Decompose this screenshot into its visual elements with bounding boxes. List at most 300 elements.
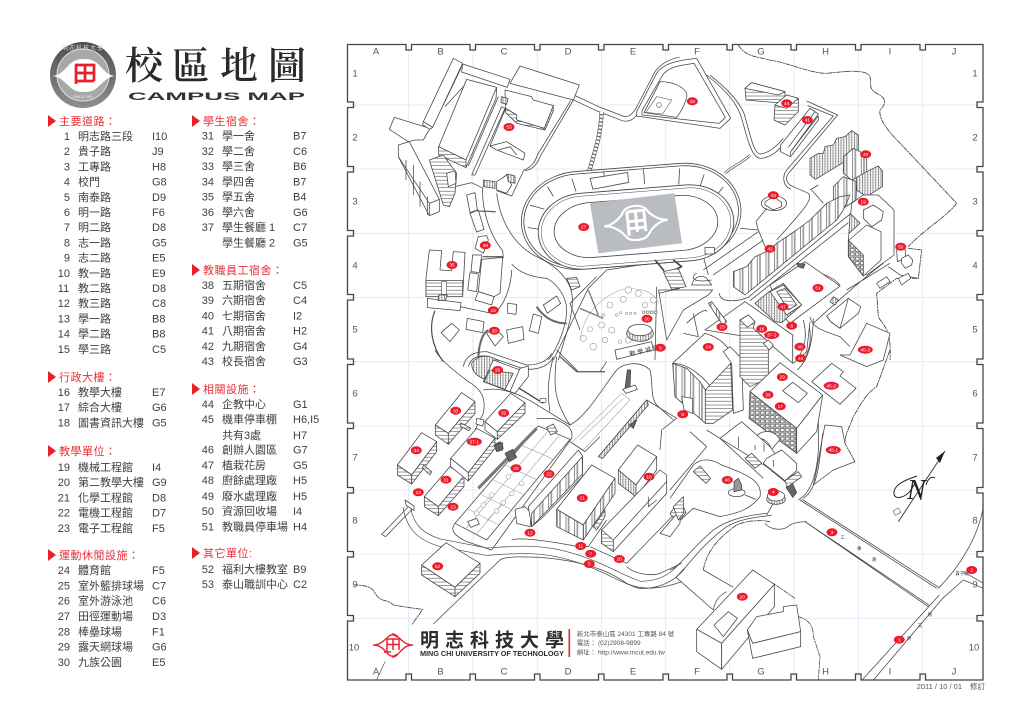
map markers: numbered red labels: 7 — [589, 551, 592, 557]
grid labels: rows right: 9 — [972, 580, 978, 590]
legend: staff dorms: G4 — [293, 341, 308, 353]
grid labels: columns bottom: J — [952, 666, 957, 678]
legend: administration: 圖書資訊大樓 — [78, 416, 144, 430]
legend: sports and leisure: D3 — [152, 611, 166, 623]
subtitle: campus map: CAMPUS MAP — [128, 91, 305, 103]
legend: staff dorms: 40 — [202, 310, 214, 322]
legend: related facilities: 植栽花房 — [222, 458, 266, 472]
legend: sports and leisure: 26 — [58, 596, 70, 608]
legend: student dorms: B7 — [293, 176, 306, 188]
legend: student dorms: 35 — [202, 192, 214, 204]
building 24: gymnasium — [673, 333, 743, 423]
legend: main roads: 教二路 — [78, 282, 111, 295]
legend: staff dorms: G3 — [293, 356, 308, 368]
map markers: numbered red labels: 16 — [646, 474, 652, 480]
grid labels: columns bottom: D — [565, 666, 572, 678]
legend: sports and leisure: 棒壘球場 — [78, 624, 122, 638]
legend: sports and leisure: 田徑運動場 — [78, 609, 133, 623]
legend: related facilities — [192, 382, 319, 534]
legend: sports and leisure: C7 — [152, 580, 166, 592]
legend: main roads: B8 — [152, 313, 165, 325]
grid labels: rows left: 10 — [349, 642, 359, 654]
legend: main roads: 明志路三段 — [78, 129, 133, 143]
legend: student dorms: B7 — [293, 130, 306, 142]
legend: main roads: 12 — [58, 298, 70, 310]
legend: teaching units: 20 — [58, 477, 70, 489]
map markers: numbered red labels: 33 — [453, 408, 459, 414]
legend: other units: 52 — [202, 564, 214, 576]
map markers: numbered red labels: 46 — [725, 478, 730, 484]
building 16 and 21: teaching block and chemistry — [515, 400, 683, 552]
legend: sports and leisure: 25 — [58, 580, 70, 592]
legend: teaching units: 21 — [58, 492, 70, 504]
grid labels: rows right — [969, 68, 979, 654]
title: 校 — [125, 35, 165, 90]
legend: student dorms: 學生餐廳 1 — [222, 220, 275, 234]
legend: main roads — [48, 114, 167, 356]
map markers: numbered red labels: 2 — [970, 568, 973, 574]
legend: main roads: 教一路 — [78, 267, 111, 280]
map markers: numbered red labels: 53 — [506, 125, 512, 131]
legend: related facilities: G7 — [293, 444, 308, 456]
map markers: numbered red labels: 35 — [449, 263, 455, 269]
grid labels: rows right: 3 — [972, 196, 978, 208]
legend: administration: 17 — [58, 402, 70, 414]
grid labels: columns top: E — [630, 46, 636, 58]
legend: student dorms: 32 — [202, 146, 214, 158]
legend: staff dorms: 九期宿舍 — [222, 339, 266, 353]
legend: main roads: G8 — [152, 177, 167, 189]
gate and founder park — [670, 466, 785, 523]
map markers: numbered red labels: 28 — [690, 99, 695, 105]
legend: staff dorms: 39 — [202, 295, 214, 307]
legend: sports and leisure: 露天網球場 — [78, 640, 133, 654]
grid labels: columns bottom — [373, 666, 957, 678]
logo: university seal: 明志科技大學 — [62, 44, 104, 52]
map markers: numbered red labels: 8 — [790, 323, 793, 329]
map markers: numbered red labels: 20 — [740, 594, 745, 600]
legend: student dorms: 36 — [202, 207, 214, 219]
legend: main roads: J9 — [152, 146, 164, 158]
legend: staff dorms: C5 — [293, 280, 307, 292]
legend: related facilities: 46 — [202, 444, 214, 456]
legend: teaching units: D7 — [152, 508, 166, 520]
legend: administration: G5 — [152, 418, 167, 430]
title: 區 — [172, 35, 210, 90]
legend: sports and leisure: E5 — [152, 657, 165, 669]
legend: administration: 行政大樓： — [59, 370, 116, 384]
legend: main roads: 教三路 — [78, 297, 111, 310]
legend: main roads: D8 — [152, 283, 166, 295]
legend: teaching units: 19 — [58, 462, 70, 474]
grid labels: rows left: 7 — [352, 452, 358, 464]
legend: teaching units: 機械工程館 — [78, 460, 133, 474]
legend: other units: 泰山職訓中心 — [222, 577, 288, 591]
legend: administration: G6 — [152, 402, 167, 414]
legend: related facilities: 44 — [202, 399, 214, 411]
grid labels: rows right: 7 — [972, 452, 978, 464]
footer: red divider — [568, 629, 570, 657]
legend: staff dorms — [192, 263, 308, 368]
legend: teaching units: 電子工程館 — [78, 521, 133, 535]
grid labels: rows left: 9 — [352, 580, 358, 590]
legend: administration: 綜合大樓 — [78, 400, 122, 414]
legend: related facilities: 共有3處 — [222, 428, 261, 442]
legend: related facilities: 51 — [202, 522, 214, 534]
road name labels: 路 — [872, 556, 877, 563]
grid labels: columns bottom: E — [630, 666, 636, 678]
baseball field — [637, 58, 731, 128]
legend: sports and leisure: 九族公園 — [78, 655, 122, 669]
footer: address block — [577, 629, 675, 656]
legend: main roads: 9 — [64, 253, 70, 265]
legend: student dorms: 31 — [202, 130, 214, 142]
map markers: numbered red labels: 38 — [492, 328, 497, 334]
legend: other units: 53 — [202, 579, 214, 591]
map markers: numbered red labels: 25 — [513, 466, 519, 472]
grid labels: rows left: 2 — [352, 132, 358, 144]
map markers: numbered red labels: 4 — [772, 490, 775, 496]
grid labels: rows right: 10 — [969, 642, 979, 654]
grid labels: rows left: 4 — [352, 260, 358, 272]
footer: university emblem — [373, 634, 413, 657]
grid labels: rows left: 8 — [352, 516, 358, 526]
grid labels: columns bottom: F — [694, 666, 700, 678]
legend: teaching units: 22 — [58, 508, 70, 520]
map markers: numbered red labels: 9 — [659, 345, 662, 351]
map markers: numbered red labels: 37-2 — [767, 333, 777, 339]
road name labels: 路 — [928, 611, 933, 618]
map markers: numbered red labels: 14 — [416, 490, 421, 496]
road name labels — [840, 535, 969, 642]
grid labels: columns bottom: B — [437, 666, 444, 678]
map markers: numbered red labels: 32 — [501, 411, 507, 417]
legend: sports and leisure: G6 — [152, 642, 167, 654]
grid labels: columns bottom: H — [822, 666, 829, 678]
grid labels: columns top: H — [822, 46, 829, 58]
grid labels: rows right: 8 — [972, 516, 978, 526]
legend: staff dorms: 41 — [202, 326, 214, 338]
map markers: numbered red labels: 43 — [771, 193, 776, 199]
building 20: second teaching building — [697, 570, 801, 669]
legend: main roads: 7 — [64, 222, 70, 234]
grid labels: columns bottom: I — [889, 666, 891, 678]
legend: main roads: E9 — [152, 268, 165, 280]
road name labels: 明 — [907, 636, 912, 642]
legend: main roads: 明二路 — [78, 221, 111, 234]
grid labels: columns top: I — [889, 46, 891, 58]
legend: staff dorms: 七期宿舍 — [222, 308, 266, 322]
legend: teaching units: 23 — [58, 523, 70, 535]
buildings: east zone dorms 40-44, 19, 47, 50 — [705, 83, 913, 367]
legend: main roads: B8 — [152, 329, 165, 341]
legend: sports and leisure: F1 — [152, 626, 165, 638]
map markers: numbered red labels: 27 — [581, 225, 587, 231]
compass: north arrow — [893, 451, 945, 522]
map markers: numbered red labels: 48 — [797, 344, 803, 350]
legend: main roads: D8 — [152, 222, 166, 234]
map markers: numbered red labels: 11 — [578, 544, 584, 550]
legend: administration — [48, 370, 167, 430]
legend: main roads: 5 — [64, 192, 70, 204]
grid labels: columns top: C — [501, 46, 508, 58]
map markers: numbered red labels: 52 — [435, 564, 441, 570]
map: roads west — [432, 59, 680, 362]
map markers: numbered red labels: 34 — [414, 448, 419, 454]
map: roads south-west — [353, 350, 682, 680]
revision date: 修訂 — [970, 681, 985, 691]
legend: sports and leisure: 室外籃排球場 — [78, 578, 144, 592]
legend: main roads: 貴子路 — [78, 144, 111, 158]
legend: related facilities: G1 — [293, 399, 308, 411]
building 17, 29, 36: main complex — [720, 363, 856, 497]
legend: staff dorms: 43 — [202, 356, 214, 368]
legend: sports and leisure: F5 — [152, 565, 165, 577]
legend: main roads: 學二路 — [78, 328, 111, 341]
map markers: numbered red labels: 44 — [784, 101, 790, 107]
legend: teaching units: 電機工程館 — [78, 506, 133, 520]
road name labels: 志 — [918, 622, 923, 628]
grid labels: rows left: 3 — [352, 196, 358, 208]
map markers: numbered red labels: 49 — [798, 356, 804, 362]
legend: student dorms: 學二舍 — [222, 144, 255, 158]
legend: main roads: E5 — [152, 253, 165, 265]
legend: main roads: 4 — [64, 177, 70, 189]
legend: student dorms: B6 — [293, 161, 306, 173]
legend: administration: E7 — [152, 387, 165, 399]
compass: north arrow: N — [906, 475, 927, 506]
legend: related facilities: H7 — [293, 430, 307, 442]
legend: other units — [192, 546, 307, 591]
legend: teaching units: F5 — [152, 523, 165, 535]
legend: main roads: 主要道路： — [59, 114, 116, 128]
map markers: numbered red labels: 13 — [450, 504, 456, 510]
map markers: numbered red labels: 41 — [805, 118, 810, 124]
map markers: numbered red labels: 36 — [765, 392, 771, 398]
legend: sports and leisure: 24 — [58, 565, 70, 577]
legend: main roads: G5 — [152, 237, 167, 249]
building 23 and 18: electronics and library — [683, 302, 813, 387]
legend: main roads: I10 — [152, 131, 167, 143]
legend: related facilities: 50 — [202, 506, 214, 518]
grid labels: columns bottom: G — [757, 666, 765, 678]
stadium centre emblem — [590, 193, 682, 253]
map markers: numbered red labels: 17 — [778, 404, 783, 410]
legend: related facilities: 49 — [202, 491, 214, 503]
legend: main roads: H8 — [152, 161, 166, 173]
legend: student dorms: 學生餐廳 2 — [222, 235, 275, 249]
legend: teaching units: 教學單位： — [59, 444, 116, 458]
legend: main roads: 志二路 — [78, 252, 111, 265]
legend: main roads: 學一路 — [78, 312, 111, 325]
map markers: numbered red labels: 45-1 — [828, 448, 838, 454]
legend: main roads: C8 — [152, 298, 166, 310]
title: 地 — [220, 35, 258, 90]
legend: main roads: 3 — [64, 161, 70, 173]
map markers: numbered red labels: 1 — [898, 637, 901, 643]
building 53: vocational training centre — [483, 66, 579, 193]
grid labels: columns top: G — [757, 46, 765, 58]
grid labels: columns top: D — [565, 46, 572, 58]
map markers: numbered red labels: 29 — [780, 375, 785, 381]
map markers: numbered red labels: 10 — [617, 557, 622, 563]
road name labels: 工 — [840, 535, 845, 540]
legend: sports and leisure — [48, 548, 167, 669]
map markers: numbered red labels: 12 — [527, 530, 533, 536]
legend: main roads: 工專路 — [78, 160, 111, 173]
legend: administration: 16 — [58, 387, 70, 399]
legend: related facilities: 教職員停車場 — [222, 520, 288, 534]
map markers: numbered red labels — [411, 97, 977, 644]
legend: related facilities: H6,I5 — [293, 414, 319, 426]
footer: university name: 明志科技大學 — [420, 630, 564, 652]
grid labels: rows left: 6 — [352, 388, 358, 400]
legend: related facilities: 47 — [202, 460, 214, 472]
grid labels: columns top — [373, 46, 957, 58]
road name labels: 專 — [857, 545, 862, 551]
legend: staff dorms: 38 — [202, 280, 214, 292]
map markers: numbered red labels: 45-3 — [860, 347, 870, 353]
legend: main roads: 8 — [64, 237, 70, 249]
legend: student dorms: B4 — [293, 192, 306, 204]
legend: staff dorms: 42 — [202, 341, 214, 353]
logo: university seal: SINCE 1963 — [73, 95, 93, 99]
grid labels: rows right: 5 — [972, 324, 978, 336]
legend: student dorms: 學生宿舍： — [203, 114, 260, 128]
map: roads east — [693, 45, 957, 360]
legend: main roads: F6 — [152, 207, 165, 219]
map markers: numbered red labels: 51 — [815, 286, 821, 292]
title: 圖 — [268, 35, 306, 90]
legend: sports and leisure: 27 — [58, 611, 70, 623]
map markers: numbered red labels: 15 — [491, 308, 496, 314]
legend: related facilities: 48 — [202, 475, 214, 487]
legend: staff dorms: 五期宿舍 — [222, 278, 266, 292]
map markers: numbered red labels: 5 — [588, 562, 591, 568]
legend: student dorms: 33 — [202, 161, 214, 173]
logo: university seal — [50, 42, 116, 108]
park: nine clans park — [560, 260, 713, 372]
legend: related facilities: 45 — [202, 414, 214, 426]
legend: student dorms: 學三舍 — [222, 159, 255, 173]
legend: related facilities: 創辦人園區 — [222, 442, 277, 456]
legend: related facilities: 機車停車棚 — [222, 412, 277, 426]
legend: main roads: 學三路 — [78, 343, 111, 356]
legend: student dorms: 學四舍 — [222, 174, 255, 188]
legend: main roads: 6 — [64, 207, 70, 219]
legend: main roads: 1 — [64, 131, 70, 143]
legend: student dorms: C7 — [293, 222, 307, 234]
legend: sports and leisure: 體育館 — [78, 563, 111, 577]
legend: main roads: 13 — [58, 313, 70, 325]
map markers: numbered red labels: 39 — [483, 243, 488, 249]
footer: address block: 網址： http://www.mcut.edu.tw — [577, 648, 665, 656]
legend: staff dorms: H2 — [293, 326, 307, 338]
legend: sports and leisure: 28 — [58, 626, 70, 638]
map markers: numbered red labels: 30 — [644, 316, 650, 322]
footer: address block: 新北市泰山區 24301 工專路 84 號 — [577, 629, 675, 638]
map markers: numbered red labels: 50 — [898, 244, 904, 250]
map markers: numbered red labels: 45-2 — [826, 383, 836, 389]
grid labels: columns bottom: A — [373, 666, 380, 678]
legend: main roads: 校門 — [78, 175, 100, 189]
map markers: numbered red labels: 6 — [681, 412, 684, 418]
legend: other units: 福利大樓教室 — [222, 562, 288, 576]
buildings: west staff dorms 35, 38, 39 — [426, 193, 580, 346]
legend: staff dorms: C4 — [293, 295, 307, 307]
grid labels: rows left: 1 — [352, 68, 358, 80]
legend: staff dorms: 教職員工宿舍： — [203, 263, 284, 277]
title — [125, 35, 306, 90]
legend: related facilities: 相關設施： — [203, 382, 260, 396]
legend: student dorms: 37 — [202, 222, 214, 234]
map markers: numbered red labels: 47 — [780, 304, 786, 310]
legend: staff dorms: 八期宿舍 — [222, 324, 266, 338]
revision date: 2011 / 10 / 01 — [917, 682, 962, 691]
grid labels: columns top: J — [952, 46, 957, 58]
legend: teaching units: G9 — [152, 477, 167, 489]
legend: student dorms: 34 — [202, 176, 214, 188]
map markers: numbered red labels: 40 — [863, 152, 869, 158]
grid labels: columns bottom: C — [501, 666, 508, 678]
building: swimming pool 26 — [472, 356, 637, 402]
legend: student dorms: 學五舍 — [222, 190, 255, 204]
legend: student dorms: 學一舍 — [222, 128, 255, 142]
legend: main roads: 15 — [58, 344, 70, 356]
grid labels: columns top: A — [373, 46, 380, 58]
legend: student dorms — [192, 114, 308, 249]
grid labels: rows right: 4 — [972, 260, 978, 272]
legend: related facilities: 企教中心 — [222, 397, 266, 411]
legend: related facilities: G5 — [293, 460, 308, 472]
map markers: numbered red labels: 31 — [443, 477, 449, 483]
legend: main roads: 2 — [64, 146, 70, 158]
legend: sports and leisure: 室外游泳池 — [78, 594, 133, 608]
map markers: numbered red labels: 24 — [706, 345, 711, 351]
legend: related facilities: I4 — [293, 506, 302, 518]
map: roads south-east — [670, 350, 983, 680]
legend: other units: 其它單位: — [203, 546, 253, 560]
buildings: student dorms 31-34, 37-1 — [397, 393, 525, 597]
legend: sports and leisure: 運動休閒設施： — [59, 548, 140, 562]
map markers: numbered red labels: 22 — [546, 472, 552, 478]
legend: staff dorms: 六期宿舍 — [222, 293, 266, 307]
footer: university name: MING CHI UNIVERSITY OF TECHNOLOGY — [420, 649, 564, 658]
legend: main roads: D9 — [152, 192, 166, 204]
legend: student dorms: G5 — [293, 237, 308, 249]
legend: related facilities: 廚餘處理廠 — [222, 473, 277, 487]
legend: sports and leisure: 29 — [58, 642, 70, 654]
map markers: numbered red labels: 26 — [495, 368, 501, 374]
stadium: athletics field — [518, 159, 745, 274]
legend: main roads: 南泰路 — [78, 190, 111, 204]
grid labels: rows right: 6 — [972, 388, 978, 400]
road name labels: 貴子路 — [955, 570, 969, 577]
legend: other units: B9 — [293, 564, 306, 576]
legend: other units: C2 — [293, 579, 307, 591]
legend: related facilities: 資源回收場 — [222, 504, 277, 518]
legend: staff dorms: 校長宿舍 — [222, 354, 266, 368]
legend: related facilities: 廢水處理廠 — [222, 489, 277, 503]
legend: main roads: 志一路 — [78, 236, 111, 249]
legend: student dorms: C6 — [293, 146, 307, 158]
map markers: numbered red labels: 37-1 — [469, 439, 479, 445]
legend: sports and leisure: C6 — [152, 596, 166, 608]
map frame with notched border — [348, 44, 983, 680]
legend: main roads: 明一路 — [78, 206, 111, 219]
legend: teaching units: 第二教學大樓 — [78, 475, 144, 489]
footer: address block: 電話： (02)2908-9899 — [577, 638, 641, 647]
